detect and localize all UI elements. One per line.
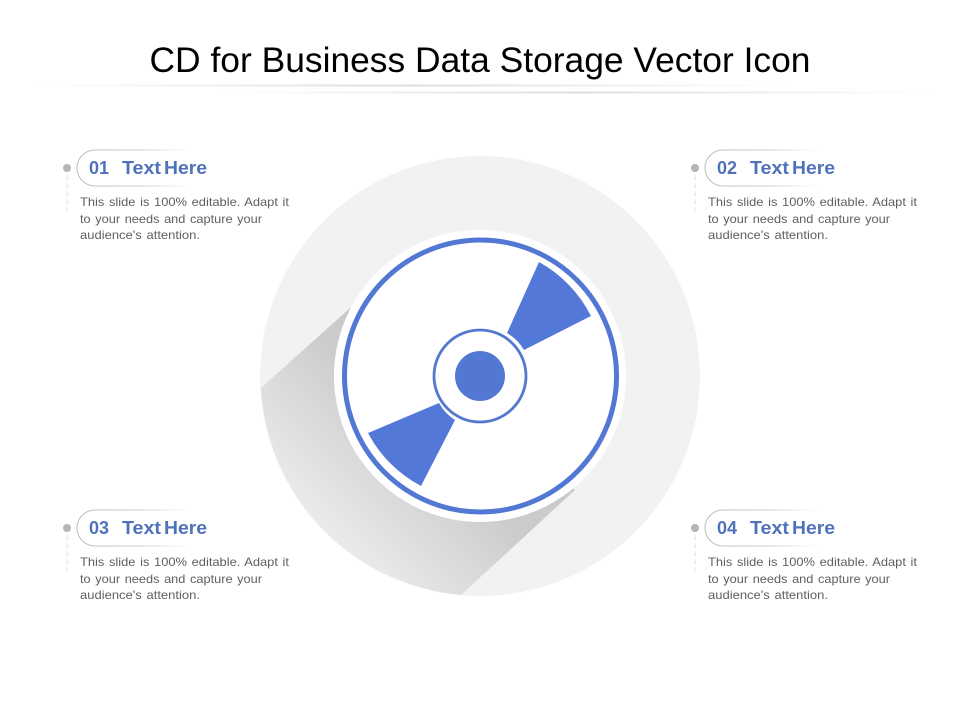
heading: 03 <box>89 518 109 538</box>
marker <box>691 164 699 172</box>
heading: 02 <box>717 158 737 178</box>
callout 03 <box>63 510 290 602</box>
disc outline <box>344 240 616 512</box>
callout 02: to your needs and capture your <box>708 212 890 226</box>
callout 04 <box>691 510 918 602</box>
callout 02: audience's attention. <box>708 228 828 242</box>
callout 04: Text <box>750 518 789 538</box>
hub <box>455 351 505 401</box>
pill outline <box>77 510 190 546</box>
callout 02: Here <box>792 158 835 178</box>
callout 01: Text <box>122 158 161 178</box>
callout 03: Here <box>164 518 207 538</box>
heading: 01 <box>89 158 109 178</box>
body text: This slide is 100% editable. Adapt it <box>708 195 918 209</box>
marker <box>691 524 699 532</box>
long shadow <box>261 308 575 595</box>
CD illustration <box>260 156 700 596</box>
pill outline <box>705 150 820 186</box>
marker <box>63 164 71 172</box>
callout 04: to your needs and capture your <box>708 572 890 586</box>
callout 04: audience's attention. <box>708 588 828 602</box>
upper right wedge <box>507 262 591 350</box>
body text: This slide is 100% editable. Adapt it <box>80 195 290 209</box>
heading: 04 <box>717 518 737 538</box>
background circle <box>260 156 700 596</box>
inner ring <box>434 330 526 422</box>
title: CD for Business Data Storage Vector Icon <box>150 41 810 80</box>
callout 01: Here <box>164 158 207 178</box>
callout 02: Text <box>750 158 789 178</box>
callout 03: to your needs and capture your <box>80 572 262 586</box>
marker <box>63 524 71 532</box>
body text: This slide is 100% editable. Adapt it <box>708 555 918 569</box>
callout 03: Text <box>122 518 161 538</box>
white disc <box>334 230 626 522</box>
callout 02 <box>691 150 918 242</box>
callout 01 <box>63 150 290 242</box>
pill outline <box>77 150 190 186</box>
body text: This slide is 100% editable. Adapt it <box>80 555 290 569</box>
callout 01: to your needs and capture your <box>80 212 262 226</box>
lower left wedge <box>368 403 455 486</box>
callout 01: audience's attention. <box>80 228 200 242</box>
callout 04: Here <box>792 518 835 538</box>
callout 03: audience's attention. <box>80 588 200 602</box>
pill outline <box>705 510 820 546</box>
